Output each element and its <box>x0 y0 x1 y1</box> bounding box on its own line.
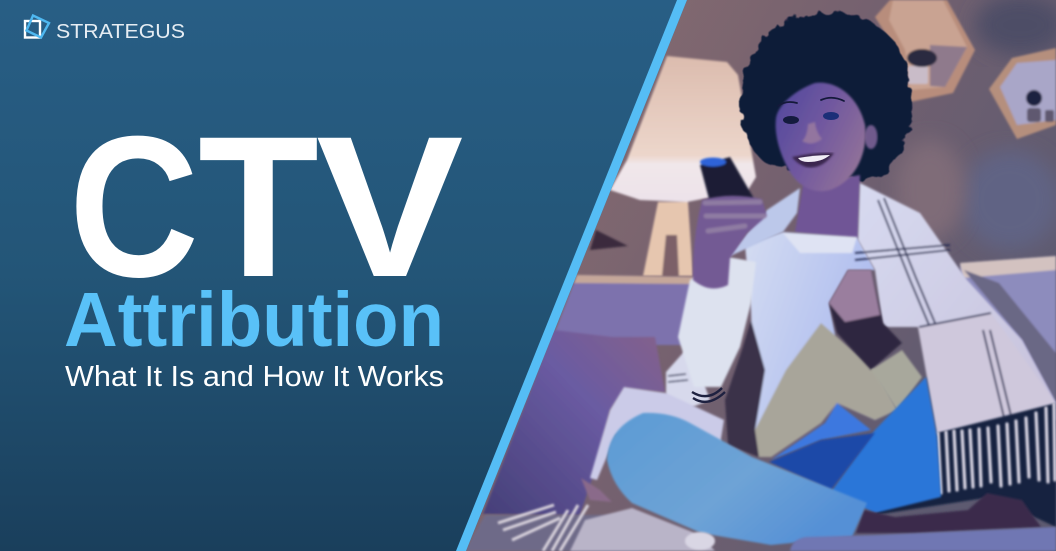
left eye <box>783 116 799 124</box>
hexagon shelf with plant <box>875 0 975 102</box>
front sofa cushion <box>790 527 1056 551</box>
sleeve cuff stripes <box>692 388 725 402</box>
nose <box>802 122 822 144</box>
wall <box>460 0 1056 551</box>
torso sweater <box>725 232 897 460</box>
jeans front leg <box>607 413 867 545</box>
hair <box>741 12 912 180</box>
blanket fringe <box>938 404 1055 493</box>
blanket fringe bottom left <box>498 478 715 551</box>
sleeve on other arm <box>871 350 922 410</box>
bare foot <box>856 493 1041 533</box>
shadow beside torso <box>725 320 765 457</box>
heading: Attribution: Attribution <box>64 277 444 363</box>
left eyebrow <box>778 102 797 106</box>
jeans waist <box>769 433 875 490</box>
title: CTV <box>69 94 463 319</box>
blue diagonal stripe <box>456 0 687 551</box>
blue highlight on shirt <box>771 403 871 460</box>
hand on blanket <box>829 270 902 370</box>
blanket bundle at knee <box>590 387 724 480</box>
logo wordmark: STRATEGUS <box>56 20 185 43</box>
right eyebrow <box>821 98 844 101</box>
subtitle: What It Is and How It Works <box>65 361 444 393</box>
teeth <box>798 155 830 162</box>
blanket at elbow <box>666 345 710 408</box>
ear <box>864 125 878 149</box>
shadow under blanket <box>875 403 1056 527</box>
seat cushion left <box>466 514 603 551</box>
icon: overlapping squares <box>25 16 49 38</box>
sofa back left <box>550 275 695 345</box>
pillow <box>483 330 665 515</box>
sweater lower beige area <box>755 323 897 457</box>
title: CTV: V <box>316 94 463 319</box>
sofa back right <box>960 256 1056 420</box>
logo: Strategus <box>25 16 185 43</box>
neck <box>795 175 860 238</box>
hexagon shelf with small plant <box>989 48 1056 139</box>
left navy panel <box>0 0 700 551</box>
title: CTV: T <box>198 95 319 319</box>
raised arm sleeve <box>678 257 756 387</box>
blanket shawl <box>728 183 1056 433</box>
smile <box>792 153 834 167</box>
face <box>776 83 866 191</box>
hand holding remote <box>693 196 767 289</box>
sweater neckline <box>783 233 857 253</box>
remote control <box>698 156 754 200</box>
right eye <box>823 112 839 120</box>
jeans back leg <box>831 377 941 513</box>
photo: woman with remote on sofa <box>460 0 1056 551</box>
lamp <box>590 56 756 276</box>
title: CTV: C <box>69 95 199 319</box>
